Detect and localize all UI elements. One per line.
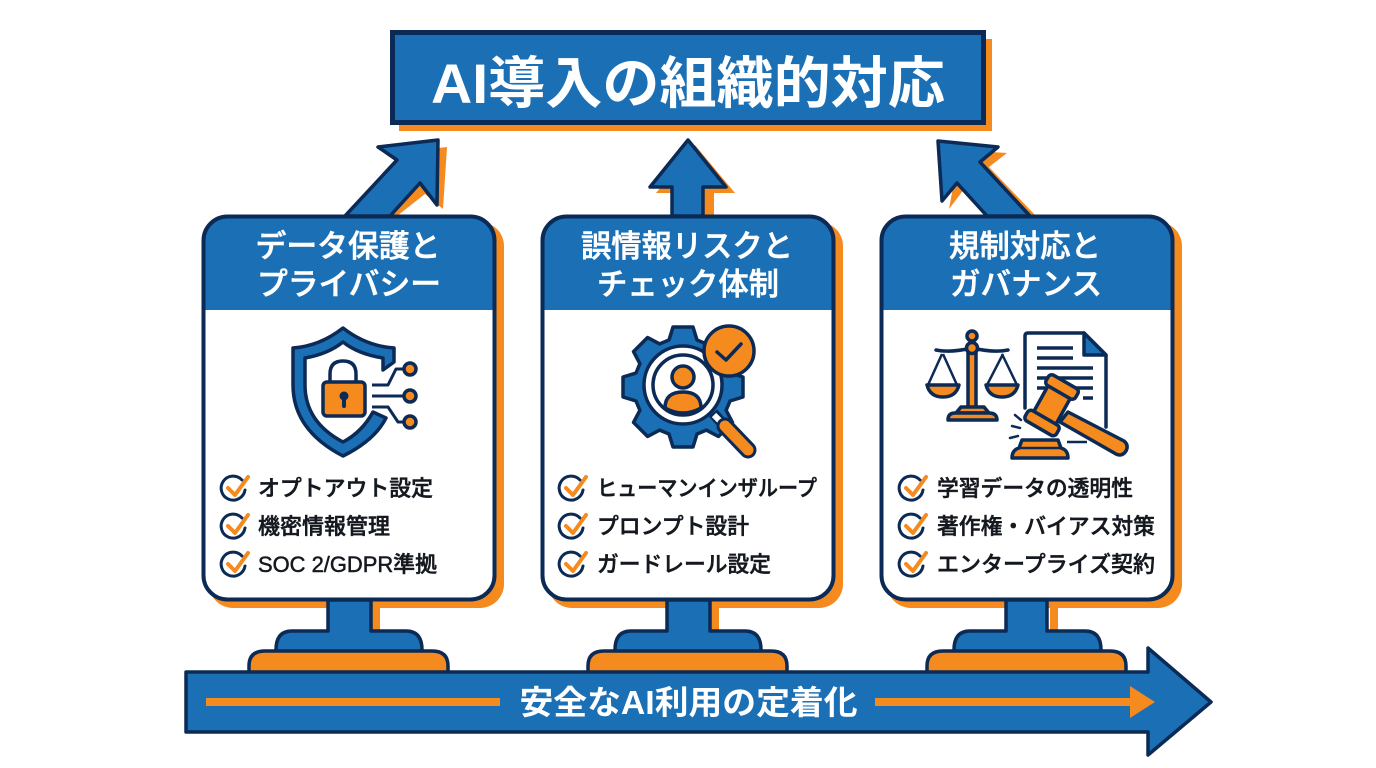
arrow: left panel to title [345,140,447,216]
icon: scales, document and gavel [927,331,1127,458]
heading [256,229,441,302]
checklist: オプトアウト設定 [258,476,433,501]
heading [949,229,1102,302]
heading: チェック体制 [597,267,779,302]
heading [581,229,793,302]
arrow: centre panel to title [650,140,735,216]
checklist: 学習データの透明性 [937,476,1133,501]
checklist: 著作権・バイアス対策 [937,514,1155,539]
bottom arrow: safe AI adoption [186,648,1211,755]
heading: プライバシー [257,267,441,302]
checklist [899,476,1155,577]
panel: data protection [204,216,504,608]
panel: regulation and governance [882,216,1182,608]
checklist: ヒューマンインザループ [597,476,817,501]
orange line left [206,698,500,706]
arrow label: 安全なAI利用の定着化 [520,684,858,721]
panel: misinformation checks [542,216,843,608]
icon: gear with magnifier and check [623,326,754,450]
icon: shield with lock and circuit [293,328,416,456]
checklist: ガードレール設定 [597,552,771,577]
checklist: 機密情報管理 [258,514,390,539]
pedestal: centre [588,600,787,673]
title banner: AI導入の組織的対応 [431,52,945,115]
heading: 規制対応と [949,229,1101,264]
pedestal: right [927,600,1126,673]
heading: データ保護と [256,229,440,264]
panel header [542,216,834,310]
checklist: プロンプト設計 [597,514,749,539]
pedestal: left [249,600,448,673]
checklist [221,476,437,577]
checklist: SOC 2/GDPR準拠 [258,552,437,577]
heading: 誤情報リスクと [581,229,793,264]
heading: ガバナンス [950,267,1102,302]
checklist: エンタープライズ契約 [937,552,1155,577]
panel header [882,216,1172,310]
checklist [559,476,817,577]
orange arrow right [875,686,1155,718]
title banner [392,32,992,131]
arrow: right panel to title [938,141,1036,216]
panel header [204,216,494,310]
